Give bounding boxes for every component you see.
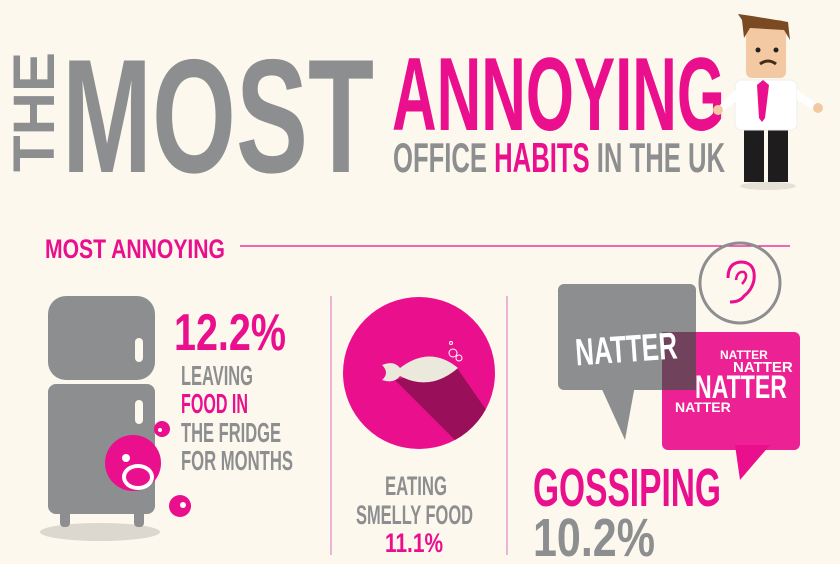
text: natter on grey bubble: NATTER xyxy=(574,325,679,374)
text: leaving food in the fridge: THE FRIDGE xyxy=(181,417,281,448)
stat: gossiping 10.2%: GOSSIPING xyxy=(533,458,721,518)
stat: gossiping 10.2% xyxy=(533,458,721,564)
icon: confused businessman xyxy=(713,14,823,190)
text: eating smelly food: 11.1% xyxy=(385,528,443,558)
icon: ear xyxy=(700,243,780,323)
icon: fish circle xyxy=(343,297,500,460)
panel: gossiping xyxy=(533,243,800,564)
icon: fridge xyxy=(40,296,160,541)
title: THE: THE xyxy=(2,52,67,172)
panel: fridge xyxy=(40,296,293,541)
icon: pink speech bubble: NATTER xyxy=(733,359,793,376)
stat: 12.2%: 12.2% xyxy=(174,304,286,362)
text: leaving food in the fridge: FOOD IN xyxy=(181,388,248,419)
icon: pink speech bubble: NATTER xyxy=(720,348,768,362)
title: MOST: MOST xyxy=(62,26,374,207)
text: leaving food in the fridge xyxy=(181,360,293,476)
icon: pink speech bubble xyxy=(662,332,800,480)
text: eating smelly food: SMELLY FOOD xyxy=(356,500,473,530)
subtitle: OFFICE HABITS IN THE UK xyxy=(393,134,725,181)
text: leaving food in the fridge: FOR MONTHS xyxy=(181,445,293,476)
text: eating smelly food xyxy=(356,471,473,558)
icon: monsters xyxy=(105,421,191,517)
icon: pink speech bubble: NATTER xyxy=(675,399,731,415)
icon: grey speech bubble xyxy=(558,284,696,440)
panel: smelly food xyxy=(343,297,500,558)
icon: pink speech bubble: NATTER xyxy=(695,369,787,405)
text: leaving food in the fridge: LEAVING xyxy=(181,360,253,391)
heading: most annoying: MOST ANNOYING xyxy=(45,234,225,264)
text: eating smelly food: EATING xyxy=(385,471,447,501)
